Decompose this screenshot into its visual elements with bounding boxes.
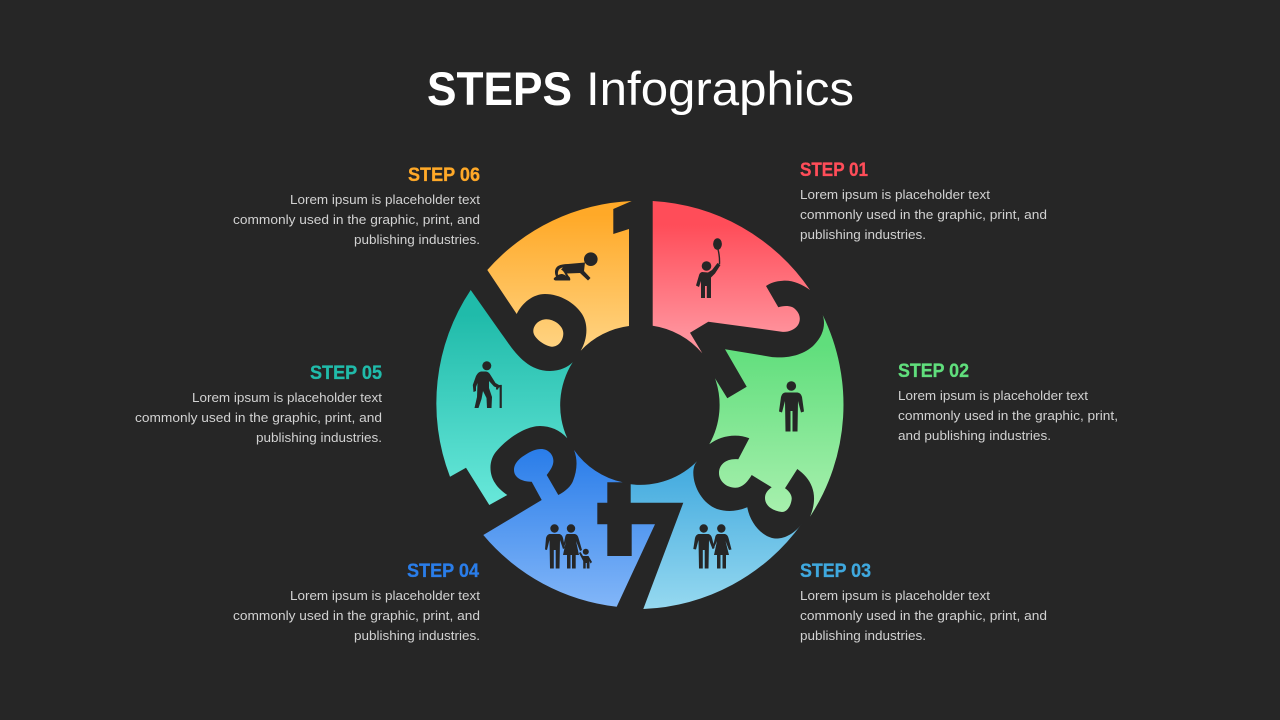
icon: family	[545, 524, 592, 568]
step 01 text: commonly used in the graphic, print, and	[800, 207, 1047, 222]
step 04 text: publishing industries.	[354, 628, 480, 643]
step 02 text: and publishing industries.	[898, 428, 1051, 443]
step 01 text	[800, 160, 1047, 242]
step 03 text: STEP 03	[800, 561, 871, 582]
step 05 text: Lorem ipsum is placeholder text	[192, 390, 382, 405]
icon: elderly person with cane	[473, 361, 501, 408]
icon: crawling baby	[554, 252, 598, 280]
icon: adult man	[779, 381, 804, 432]
step 03 text: commonly used in the graphic, print, and	[800, 608, 1047, 623]
step 06 text: Lorem ipsum is placeholder text	[290, 192, 480, 207]
wheel diagram	[436, 201, 843, 609]
step 05 text: publishing industries.	[256, 430, 382, 445]
segment 5: teal	[436, 290, 573, 505]
step 05 text	[135, 363, 382, 445]
step 03 text: publishing industries.	[800, 628, 926, 643]
step 06 text: STEP 06	[408, 165, 480, 186]
step 05 text: commonly used in the graphic, print, and	[135, 410, 382, 425]
step 03 text: Lorem ipsum is placeholder text	[800, 588, 990, 603]
step 05 text: STEP 05	[310, 363, 382, 384]
step 02 text	[898, 361, 1118, 443]
segment 6: orange	[487, 201, 632, 351]
segment 3: sky blue	[631, 460, 802, 609]
step 02 text: commonly used in the graphic, print,	[898, 408, 1118, 423]
icon: child with balloon	[696, 238, 722, 298]
icon: couple	[693, 524, 732, 568]
segment 2: green	[709, 315, 843, 517]
step 06 text: publishing industries.	[354, 232, 480, 247]
step 04 text	[233, 561, 480, 643]
segment 4: blue	[483, 449, 655, 607]
step 06 text	[233, 165, 480, 247]
step 04 text: commonly used in the graphic, print, and	[233, 608, 480, 623]
step 06 text: commonly used in the graphic, print, and	[233, 212, 480, 227]
segment 1: red	[653, 201, 810, 353]
step 01 text: STEP 01	[800, 160, 868, 181]
step 01 text: publishing industries.	[800, 227, 926, 242]
step 02 text: Lorem ipsum is placeholder text	[898, 388, 1088, 403]
step 03 text	[800, 561, 1047, 643]
step 04 text: STEP 04	[407, 561, 479, 582]
step 02 text: STEP 02	[898, 361, 969, 382]
step 01 text: Lorem ipsum is placeholder text	[800, 187, 990, 202]
title: STEPS	[427, 62, 572, 115]
title: Infographics	[586, 62, 854, 115]
title	[427, 62, 854, 115]
step 04 text: Lorem ipsum is placeholder text	[290, 588, 480, 603]
